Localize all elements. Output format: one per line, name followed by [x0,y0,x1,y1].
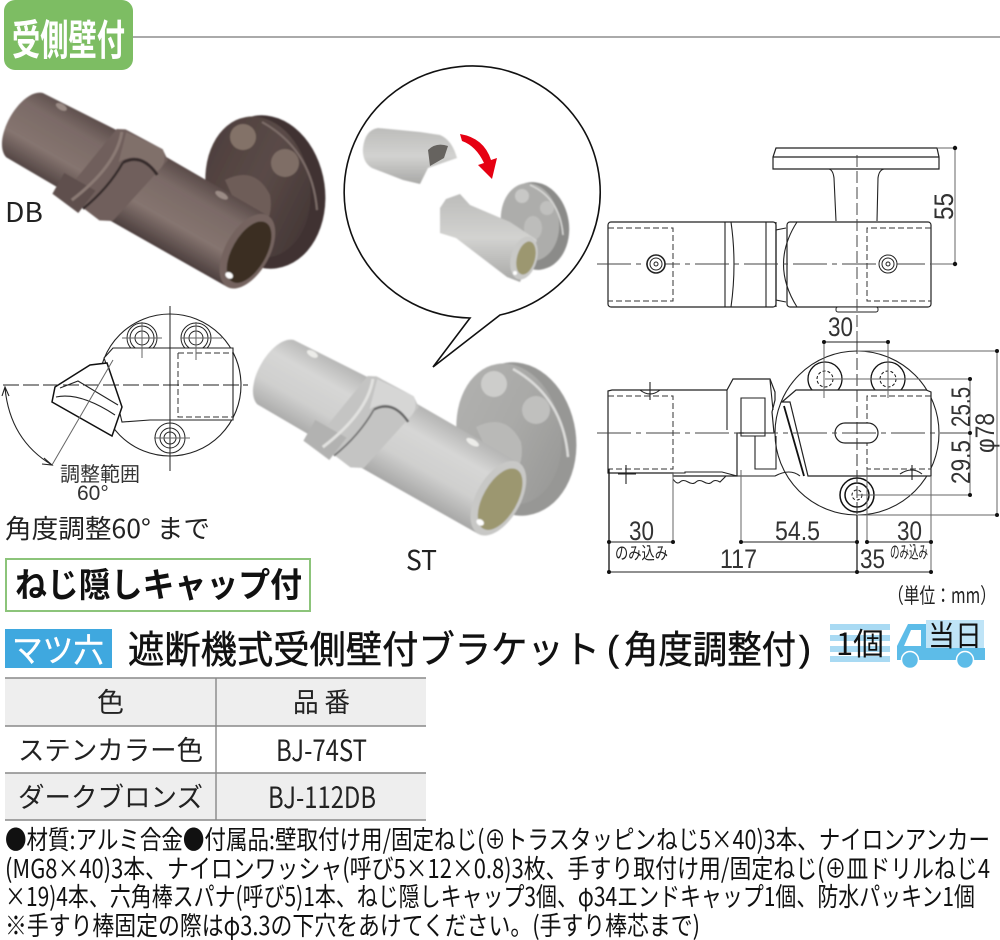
callout: ねじ隠しキャップ付: ねじ隠しキャップ付 [15,558,302,607]
dimension labels: side view: 29.5 [946,440,976,484]
dimension labels: side view: のみ込み [615,539,668,564]
quantity tag: 1個: 1個 [836,619,884,664]
diagram: 60 degree adjustment range [2,306,248,471]
dimension labels: side view: 30 [897,516,922,546]
drawing: side view [597,340,999,574]
text: 角度調整60°まで: 角度調整60° まで [5,509,210,546]
callout bubble: cap detail [344,66,600,367]
row: stainless colour: BJ-74ST [276,728,367,770]
dimension labels: side view: のみ込み [890,538,928,563]
row: dark bronze: BJ-112DB [268,775,376,817]
header badge: 受側壁付: 受側壁付 [12,7,125,68]
caption: 調整範囲 60° [60,458,140,505]
table header: 品 番 [293,681,350,720]
arrow: red cap direction [460,134,497,179]
table header [97,681,350,720]
table: colours and part numbers [5,678,426,820]
maker badge: マツ六: マツ六 [12,624,104,672]
product title: 遮断機式受側壁付ブラケット [128,619,600,674]
label: DB: DB [5,191,43,230]
dimension labels: side view: 25.5 [946,387,976,427]
product title: 角度調整付 [624,619,796,674]
icon: same-day delivery truck [897,613,985,668]
caption: 調整範囲 60°: 調整範囲 [60,458,140,487]
row: dark bronze: ダークブロンズ [18,776,203,815]
icon: same-day delivery truck: 当日 [928,613,982,655]
table header: 色 [97,681,124,720]
dimension labels: side view: 54.5 [775,516,820,546]
dimension labels: side view: 30 [629,516,654,546]
icon: cap opening [428,145,448,166]
dimension labels: side view: 35 [860,544,885,574]
specification notes [5,820,990,940]
caption: 調整範囲 60°: 60° [77,482,109,505]
dimension labels: side view [615,387,1000,574]
row: stainless colour [18,728,367,770]
row: dark bronze [18,775,376,817]
drawing: top view [597,146,957,342]
dimension labels: side view: 117 [720,544,757,574]
dimension: 55: 55 [929,193,959,220]
row: stainless colour: ステンカラー色 [18,729,203,768]
label: ST: ST [406,539,437,578]
product title: ) [799,628,811,669]
dimension: 30 top: 30 [828,312,853,342]
dimension labels: side view: φ78 [970,413,1000,453]
photo: DB dark bronze bracket [0,76,335,306]
photo: screw cap [363,128,457,184]
header badge: 受側壁付 [4,0,133,70]
photo: small bracket [440,178,575,283]
photo: ST stainless colour bracket [237,323,586,553]
product title: ( [607,628,619,669]
